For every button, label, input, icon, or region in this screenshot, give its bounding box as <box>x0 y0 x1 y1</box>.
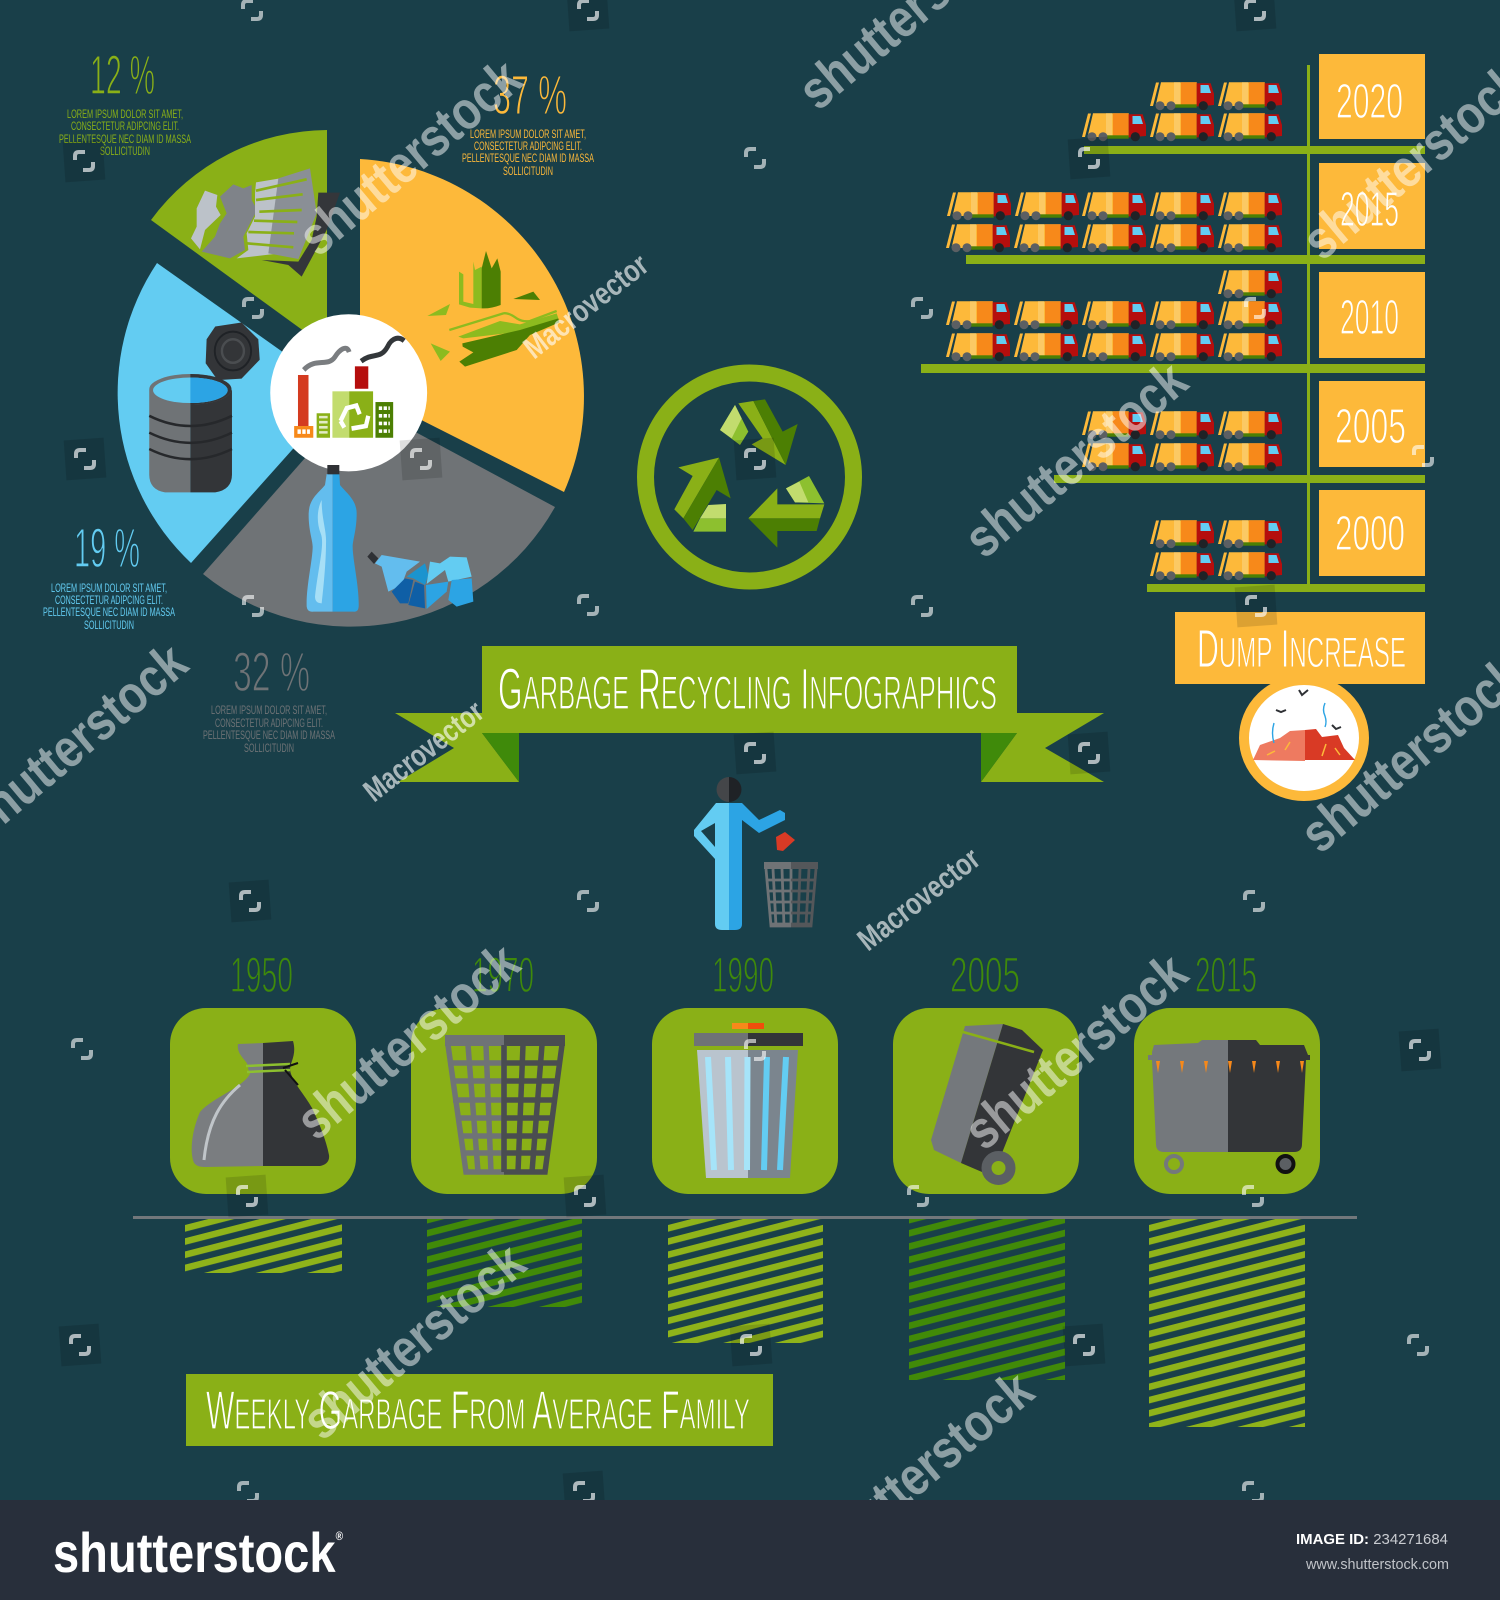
axis line <box>133 1216 1357 1219</box>
text block: 12 percent description: CONSECTETUR ADIPCING ELIT. <box>71 121 179 133</box>
label: weekly garbage from average family: WEEKLY GARBAGE FROM AVERAGE FAMILY <box>206 1379 750 1441</box>
timeline: 2005 wheelie bin <box>893 947 1079 1194</box>
footer url: www.shutterstock.com <box>1305 1556 1449 1573</box>
icon: recycling symbol in ring <box>646 373 854 581</box>
icon: person throwing trash into bin <box>694 777 818 930</box>
icon: torn paper <box>191 168 340 277</box>
year 2020 row <box>1082 54 1425 154</box>
bar: 1990 <box>668 1219 823 1343</box>
year 2000 row: 2000 <box>1335 507 1405 561</box>
year 2015 row <box>946 163 1425 264</box>
timeline: 2015 dumpster: 2015 <box>1195 947 1257 1003</box>
text block: 19 percent description: LOREM IPSUM DOLOR SIT AMET, <box>51 583 167 595</box>
watermark overlay: shutterstock <box>285 931 531 1151</box>
stat: 19 percent: 19 % <box>74 516 140 579</box>
text block: 32 percent description: SOLLICITUDIN <box>244 743 294 755</box>
icon: plastic bottles <box>307 465 473 612</box>
text block: 32 percent description: LOREM IPSUM DOLOR SIT AMET, <box>211 705 327 717</box>
timeline: 1950 garbage bag: 1950 <box>230 947 293 1003</box>
text block: 12 percent description: SOLLICITUDIN <box>100 146 150 158</box>
footer logo: ® <box>336 1529 343 1543</box>
text block: 12 percent description <box>59 109 191 158</box>
bar: 2005 <box>909 1219 1065 1380</box>
watermark overlay: shutterstock <box>953 941 1199 1161</box>
year 2005 row: 2005 <box>1335 400 1406 454</box>
footer image id: IMAGE ID: 234271684 <box>1296 1531 1448 1548</box>
pie chart: garbage composition <box>118 130 584 627</box>
timeline: 2005 wheelie bin: 2005 <box>950 947 1020 1003</box>
watermark overlay: shutterstock <box>287 47 533 267</box>
timeline: 1970 wire basket: 1970 <box>472 947 534 1003</box>
title ribbon <box>395 646 1104 782</box>
watermark overlay: shutterstock <box>799 1359 1045 1579</box>
chart: dump increase by year <box>921 54 1425 592</box>
bar: 2015 <box>1149 1219 1305 1427</box>
slice: plastic 32% <box>203 400 555 627</box>
stat: 37 percent <box>462 63 594 178</box>
stat: 19 percent <box>43 516 175 632</box>
text block: 32 percent description: CONSECTETUR ADIPCING ELIT. <box>215 718 323 730</box>
icon: broken glass bottle <box>427 251 559 367</box>
bar: 1950 <box>185 1219 342 1273</box>
watermark overlay: shutterstock <box>291 1231 537 1451</box>
watermark overlay: Macrovector <box>357 694 490 809</box>
center circle: recycling factory <box>270 314 427 471</box>
text block: 19 percent description <box>43 583 175 632</box>
text block: 37 percent description <box>462 129 594 178</box>
text block: 32 percent description <box>203 705 335 755</box>
text block: 37 percent description: LOREM IPSUM DOLOR SIT AMET, <box>470 129 586 141</box>
timeline: 1990 metal bin <box>652 947 838 1194</box>
title text: GARBAGE RECYCLING INFOGRAPHICS <box>498 657 997 722</box>
text block: 32 percent description: PELLENTESQUE NEC DIAM ID MASSA <box>203 730 335 742</box>
footer bar <box>0 1500 1500 1600</box>
stat: 32 percent: 32 % <box>233 640 310 703</box>
year 2010 row: 2010 <box>1340 291 1399 345</box>
slice: metal 19% <box>118 263 342 563</box>
text block: 37 percent description: PELLENTESQUE NEC DIAM ID MASSA <box>462 153 594 165</box>
icon: metal can with lid <box>149 322 260 492</box>
year 2005 row <box>1054 381 1425 483</box>
stat: 37 percent: 37 % <box>493 63 567 126</box>
year 2010 row <box>921 270 1425 373</box>
stat: 12 percent <box>59 43 191 158</box>
timeline: 2015 dumpster <box>1134 947 1320 1194</box>
watermark overlay: Macrovector <box>851 841 987 958</box>
slice: glass 37% <box>360 159 584 492</box>
footer logo: shutterstock <box>53 1521 389 1584</box>
slice: paper 12% <box>151 130 327 350</box>
text block: 37 percent description: SOLLICITUDIN <box>503 166 553 178</box>
watermark overlay: shutterstock <box>953 349 1199 569</box>
stat: 32 percent <box>203 640 335 755</box>
timeline: 1950 garbage bag <box>170 947 356 1194</box>
vertical axis <box>1307 65 1310 585</box>
year 2020 row: 2020 <box>1336 75 1403 129</box>
year 2015 row: 2015 <box>1340 183 1399 237</box>
label: dump increase <box>1175 612 1425 684</box>
text block: 19 percent description: CONSECTETUR ADIPCING ELIT. <box>55 595 163 607</box>
text block: 19 percent description: PELLENTESQUE NEC DIAM ID MASSA <box>43 607 175 619</box>
text block: 12 percent description: LOREM IPSUM DOLOR SIT AMET, <box>67 109 183 121</box>
stat: 12 percent: 12 % <box>90 43 155 106</box>
timeline: 1970 wire basket <box>411 947 597 1194</box>
year 2000 row <box>1147 490 1425 592</box>
text block: 19 percent description: SOLLICITUDIN <box>84 620 134 632</box>
text block: 37 percent description: CONSECTETUR ADIPCING ELIT. <box>474 141 582 153</box>
bar: 1970 <box>427 1219 582 1307</box>
text block: 12 percent description: PELLENTESQUE NEC DIAM ID MASSA <box>59 134 191 146</box>
timeline: 1990 metal bin: 1990 <box>712 947 774 1003</box>
watermark overlay: Macrovector <box>517 247 655 366</box>
bar chart: weekly garbage <box>185 1219 1305 1427</box>
icon: landfill dump circle <box>1244 680 1364 796</box>
label: dump increase: DUMP INCREASE <box>1197 619 1406 679</box>
